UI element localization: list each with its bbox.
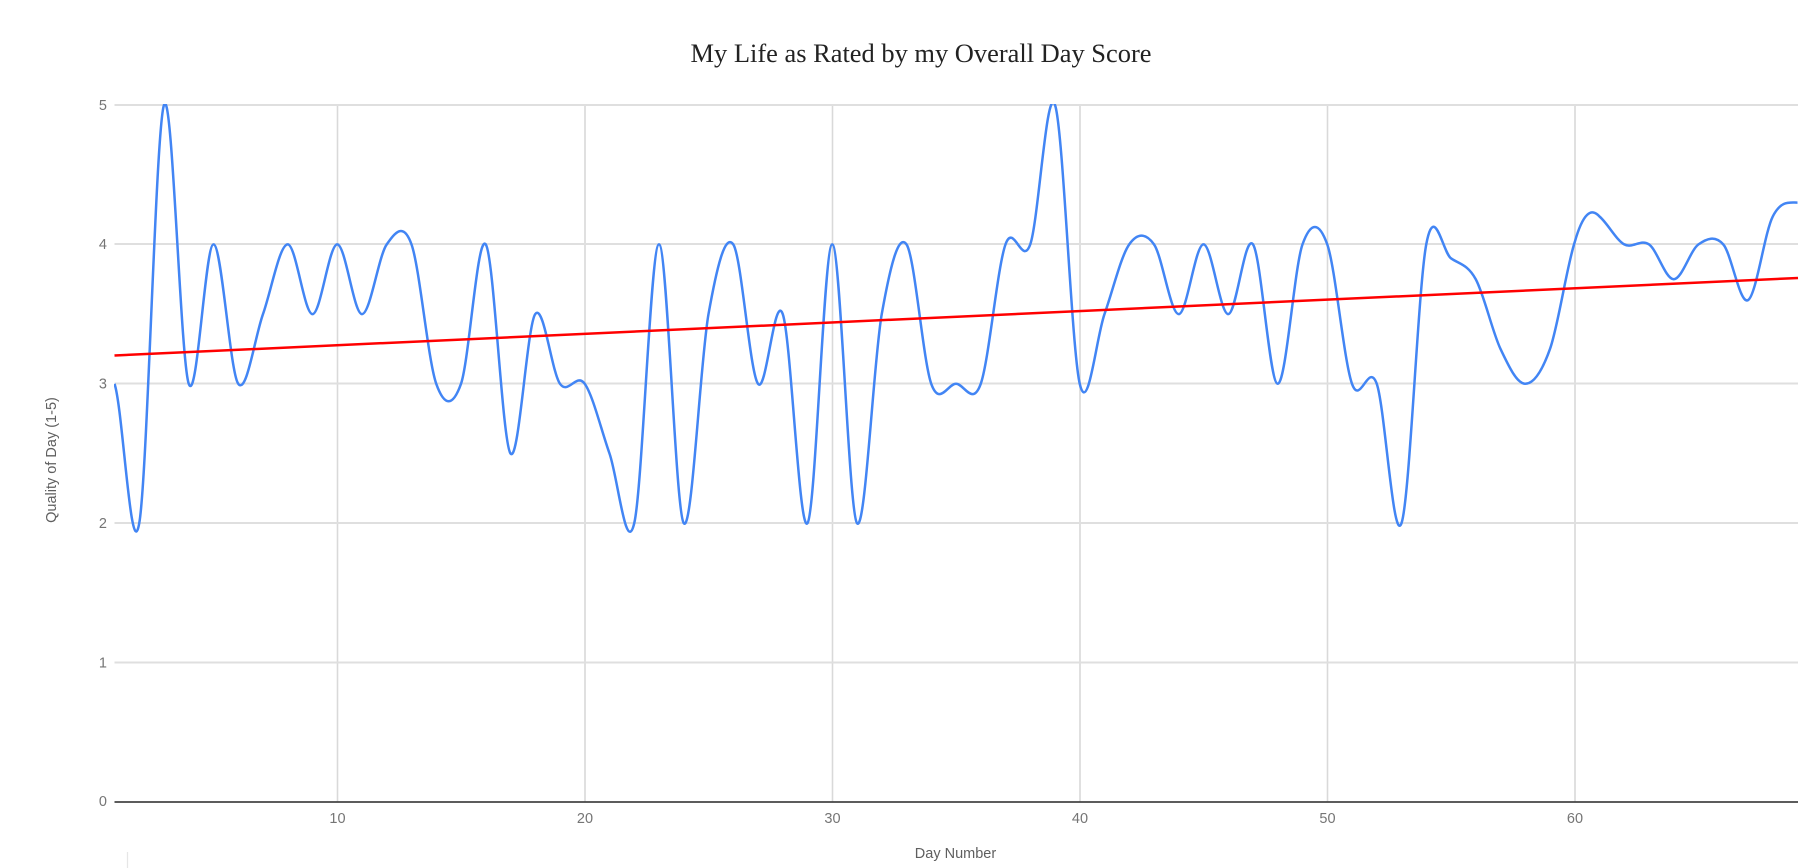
x axis tick labels: 30 [824,811,841,827]
title: My Life as Rated by my Overall Day Score [690,39,1152,68]
x axis tick labels [329,811,1583,827]
y axis tick labels: 5 [99,98,107,114]
gridlines [114,105,1798,802]
faint tick mark [126,852,128,868]
y axis tick labels: 2 [99,516,107,532]
x axis title: Day Number [915,846,996,862]
y axis tick labels [99,98,107,810]
x axis tick labels: 60 [1567,811,1583,827]
blue series: daily quality score [114,102,1798,532]
x axis baseline [114,801,1798,803]
y axis tick labels: 1 [99,656,107,672]
y axis tick labels: 4 [99,237,107,253]
x axis tick labels: 50 [1319,811,1336,827]
x axis tick labels: 20 [577,811,593,827]
y axis tick labels: 3 [99,376,107,392]
y axis title: Quality of Day (1-5) [44,397,60,523]
y axis tick labels: 0 [99,794,107,810]
red linear trendline [114,278,1798,356]
x axis tick labels: 10 [329,811,346,827]
x axis tick labels: 40 [1072,811,1088,827]
